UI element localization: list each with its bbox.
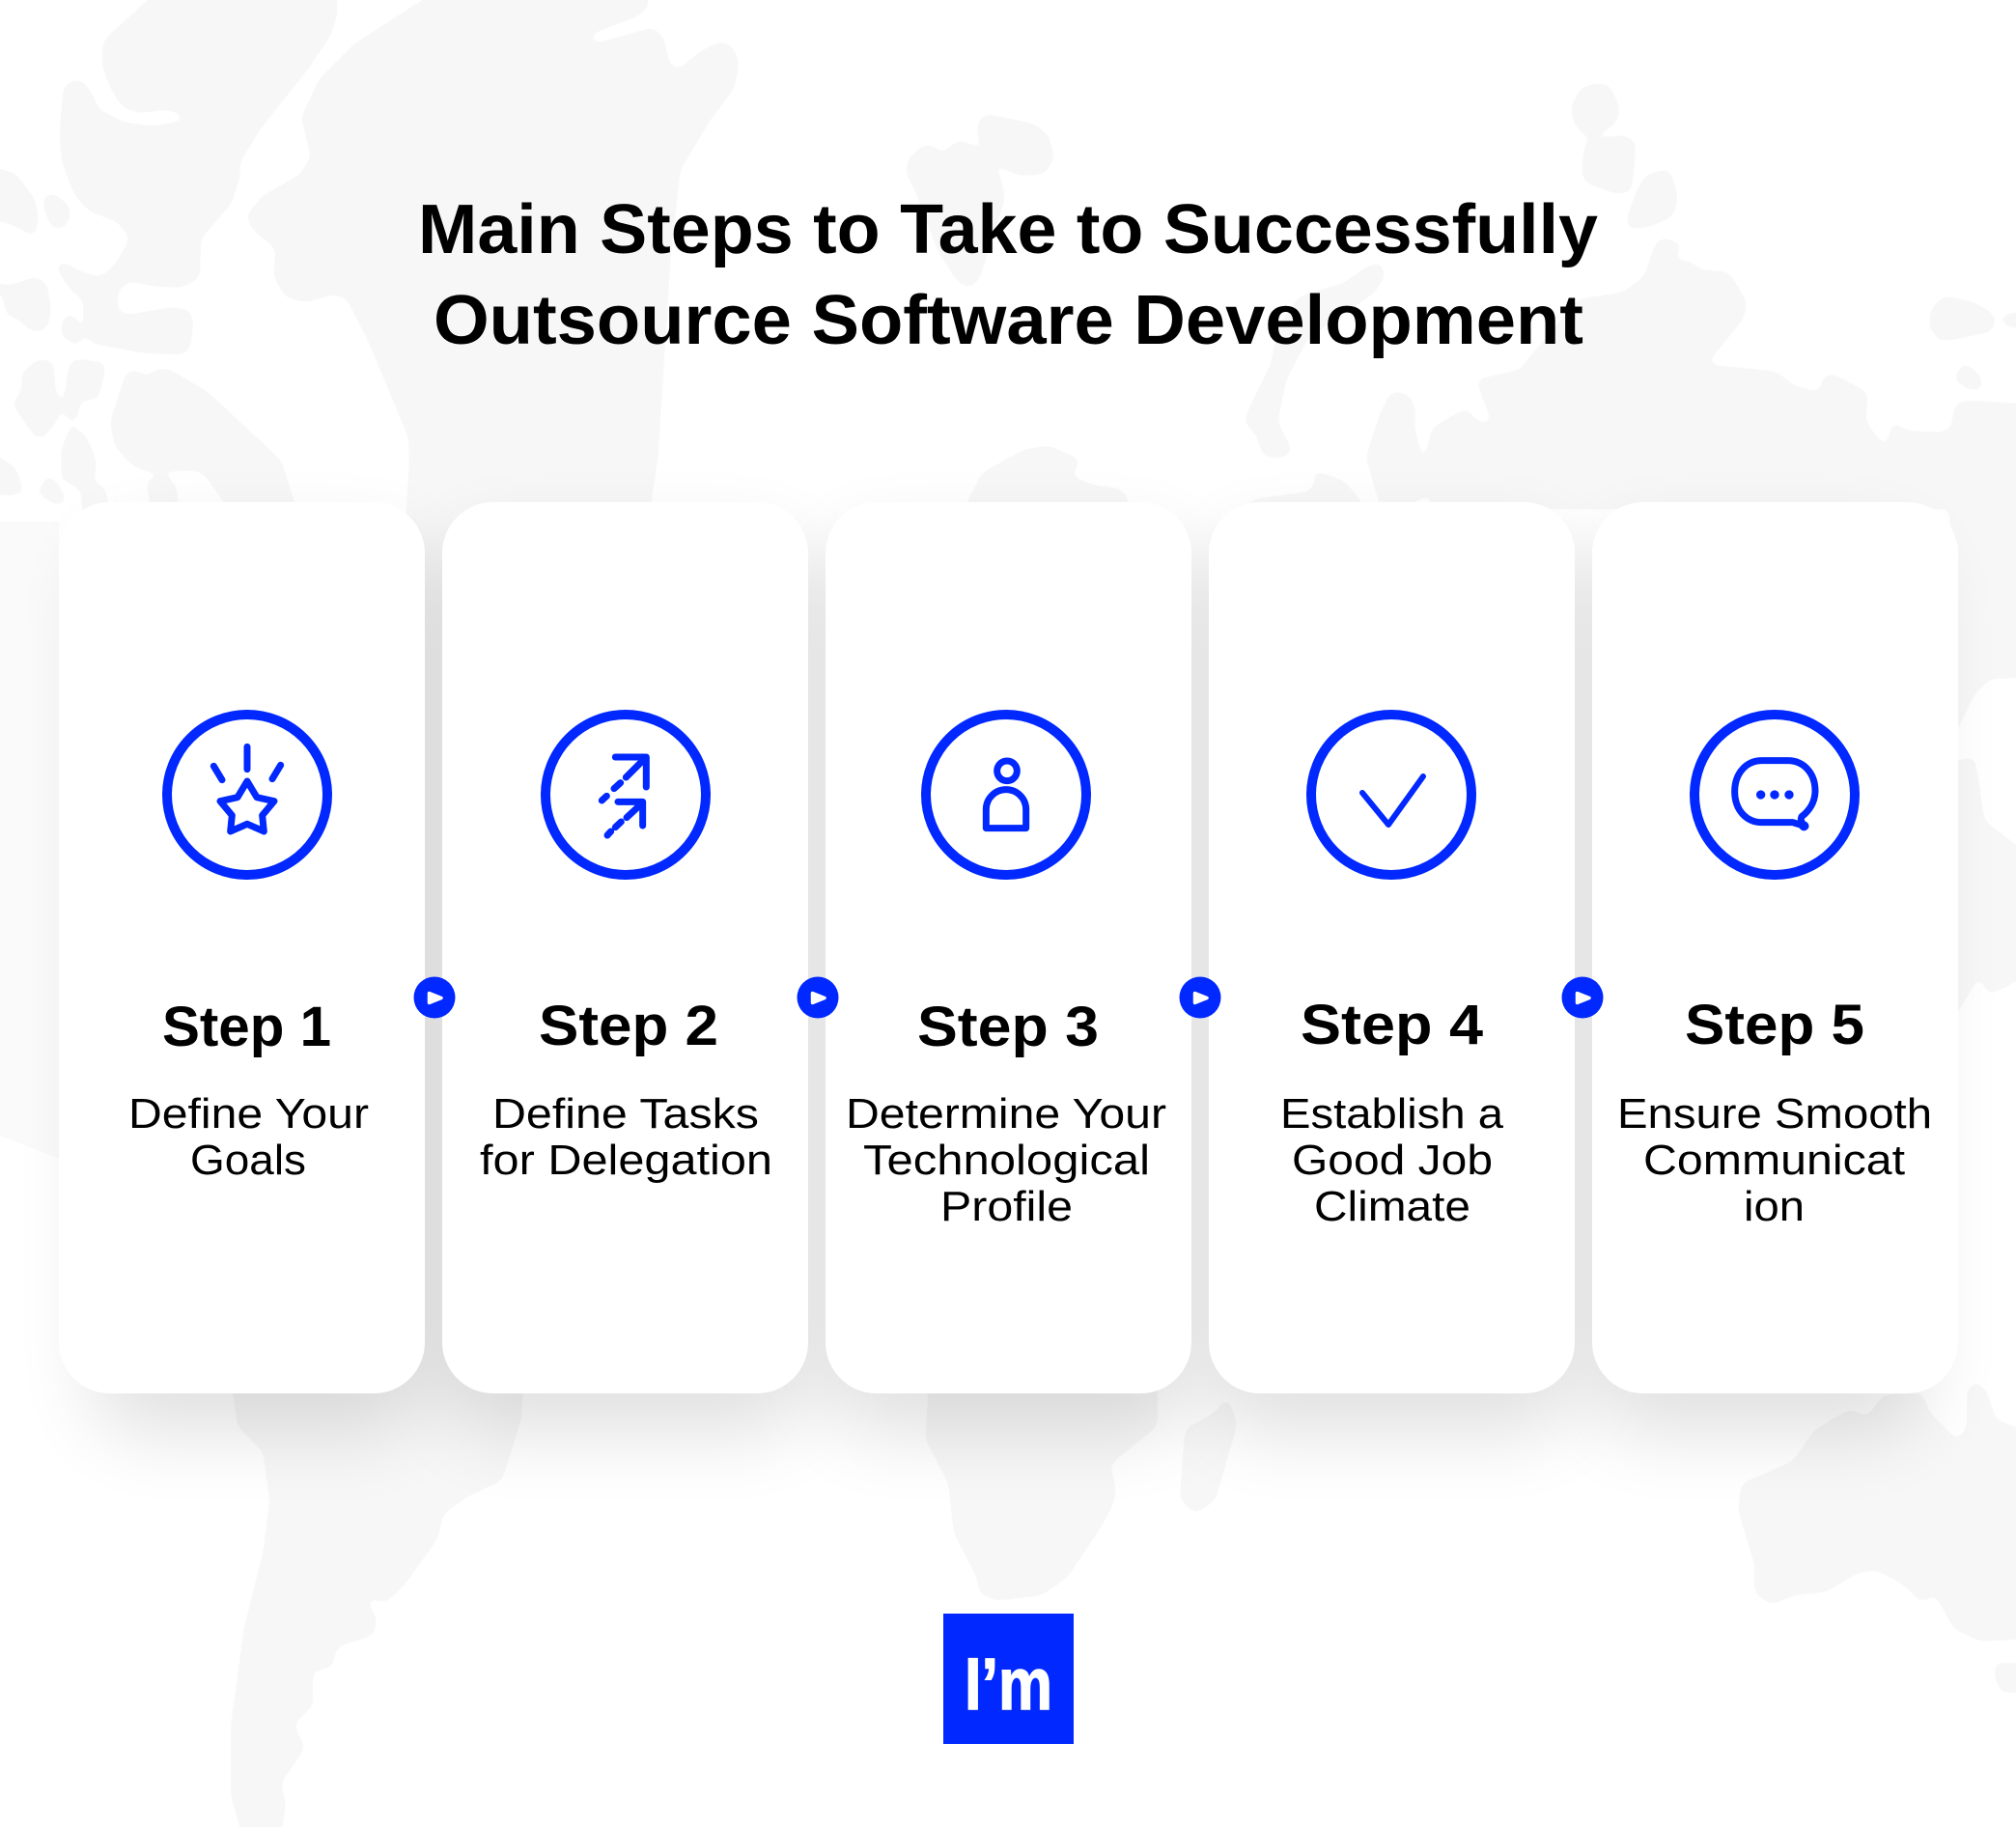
title — [418, 191, 1598, 359]
text: ensure smooth communication: ion — [1744, 1183, 1805, 1230]
icon: star with rays — [167, 715, 327, 875]
text: establish a good job climate: Establish a — [1280, 1090, 1504, 1138]
text: establish a good job climate: Good Job — [1292, 1137, 1493, 1184]
text: determine your technological profile: Determine Your — [846, 1090, 1166, 1138]
text: define your goals — [128, 1090, 369, 1184]
text: determine your technological profile — [846, 1090, 1166, 1230]
text: determine your technological profile: Profile — [940, 1183, 1073, 1230]
heading: step 4: Step 4 — [1301, 994, 1483, 1056]
heading: step 2: Step 2 — [539, 995, 718, 1057]
logo — [943, 1614, 1074, 1744]
panel: step 4 — [1209, 502, 1575, 1393]
panel: step 2 — [442, 502, 808, 1393]
title: Outsource Software Development — [434, 282, 1583, 359]
icon: double dashed arrows — [546, 715, 706, 875]
text: establish a good job climate — [1280, 1090, 1504, 1230]
icon: check mark — [1311, 715, 1471, 875]
text: ensure smooth communication: Ensure Smooth — [1617, 1090, 1932, 1138]
text: define tasks for delegation — [480, 1090, 772, 1184]
arrow: step 4 to 5 — [1562, 977, 1603, 1018]
text: establish a good job climate: Climate — [1314, 1183, 1470, 1230]
text: ensure smooth communication: Communicat — [1643, 1137, 1905, 1184]
icon: chat bubble — [1694, 715, 1855, 875]
panel: step 3 — [826, 502, 1191, 1393]
text: determine your technological profile: Technological — [863, 1137, 1150, 1184]
text: define your goals: Goals — [190, 1137, 306, 1184]
text: define your goals: Define Your — [128, 1090, 369, 1138]
heading: step 5: Step 5 — [1685, 994, 1864, 1056]
arrow: step 1 to 2 — [413, 977, 456, 1018]
panel: step 1 — [59, 502, 425, 1393]
text: define tasks for delegation: Define Tasks — [492, 1090, 759, 1138]
icon: person — [926, 715, 1086, 875]
panel: step 5 — [1592, 502, 1958, 1393]
title: Main Steps to Take to Successfully — [418, 191, 1598, 268]
text: ensure smooth communication — [1617, 1090, 1932, 1230]
arrow: step 2 to 3 — [798, 977, 838, 1018]
heading: step 3: Step 3 — [917, 996, 1099, 1058]
text: define tasks for delegation: for Delegation — [480, 1137, 772, 1184]
arrow: step 3 to 4 — [1180, 977, 1220, 1018]
heading: step 1: Step 1 — [162, 996, 331, 1058]
logo: I’m — [965, 1644, 1052, 1726]
